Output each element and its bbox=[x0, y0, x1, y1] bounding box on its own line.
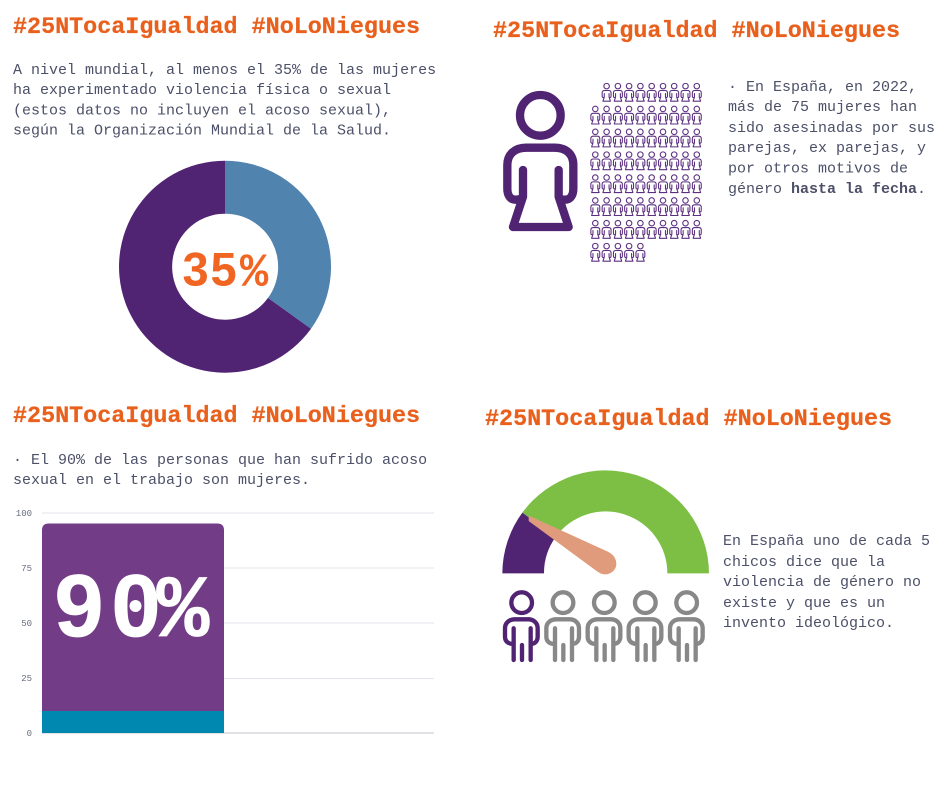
heading: top right hashtags: #25NTocaIgualdad #NoLoNiegues bbox=[493, 19, 900, 45]
text block: Spain 2022 femicides: · En España, en 2022, bbox=[728, 79, 917, 96]
bar chart: 90 percent bbox=[16, 509, 434, 739]
text block: Spain 2022 femicides: género hasta la fecha. bbox=[728, 181, 926, 198]
pictogram: 75 small women bbox=[591, 83, 701, 261]
gauge chart: one in five bbox=[502, 470, 709, 574]
panel: workplace harassment bbox=[13, 404, 434, 739]
text block: 35 percent statement bbox=[13, 62, 436, 140]
text block: Spain 2022 femicides: por otros motivos de bbox=[728, 160, 908, 178]
heading: bottom left hashtags: #25NTocaIgualdad #NoLoNiegues bbox=[13, 404, 420, 430]
text block: Spain 2022 femicides: más de 75 mujeres han bbox=[728, 99, 917, 116]
text block: 90 percent statement bbox=[13, 452, 427, 489]
axis labels: 75 bbox=[21, 564, 32, 574]
text block: 90 percent statement: sexual en el trabajo son mujeres. bbox=[13, 472, 310, 489]
text block: one in five boys: invento ideológico. bbox=[723, 615, 894, 632]
icon: large woman bbox=[507, 95, 573, 227]
text block: Spain 2022 femicides: sido asesinadas por sus bbox=[728, 120, 935, 137]
donut chart: 35 percent bbox=[119, 161, 331, 373]
heading: top left hashtags: #25NTocaIgualdad #NoLoNiegues bbox=[13, 15, 420, 41]
axis labels: 0 bbox=[27, 729, 32, 739]
text block: one in five boys: En España uno de cada 5 bbox=[723, 533, 930, 550]
panel: global violence statistic bbox=[13, 15, 436, 373]
text block: one in five boys: chicos dice que la bbox=[723, 554, 885, 571]
text block: 35 percent statement: (estos datos no incluyen el acoso sexual), bbox=[13, 102, 391, 120]
axis labels: 50 bbox=[21, 619, 32, 629]
bar: purple segment bbox=[42, 524, 224, 711]
text block: 90 percent statement: · El 90% de las personas que han sufrido acoso bbox=[13, 452, 427, 469]
gauge needle bbox=[529, 517, 616, 574]
text block: one in five boys: existe y que es un bbox=[723, 595, 885, 612]
text block: one in five boys bbox=[723, 533, 930, 632]
text block: 35 percent statement: según la Organización Mundial de la Salud. bbox=[13, 122, 391, 140]
axis labels: 25 bbox=[21, 674, 32, 684]
text block: one in five boys: violencia de género no bbox=[723, 574, 921, 591]
bar: teal segment bbox=[42, 711, 224, 733]
bar value: 90% bbox=[54, 556, 210, 663]
donut value: 35% bbox=[182, 243, 269, 301]
text block: 35 percent statement: A nivel mundial, al menos el 35% de las mujeres bbox=[13, 62, 436, 79]
heading: bottom right hashtags: #25NTocaIgualdad #NoLoNiegues bbox=[485, 407, 892, 433]
text block: Spain 2022 femicides bbox=[728, 79, 935, 198]
axis labels: 100 bbox=[16, 509, 32, 519]
text block: 35 percent statement: ha experimentado violencia física o sexual bbox=[13, 82, 391, 99]
panel: femicides in Spain bbox=[493, 19, 935, 261]
panel: denial among boys bbox=[485, 407, 930, 660]
text block: Spain 2022 femicides: parejas, ex parejas, y bbox=[728, 140, 926, 157]
axis labels bbox=[16, 509, 32, 739]
pictogram: one purple boy and four grey boys bbox=[505, 592, 703, 660]
